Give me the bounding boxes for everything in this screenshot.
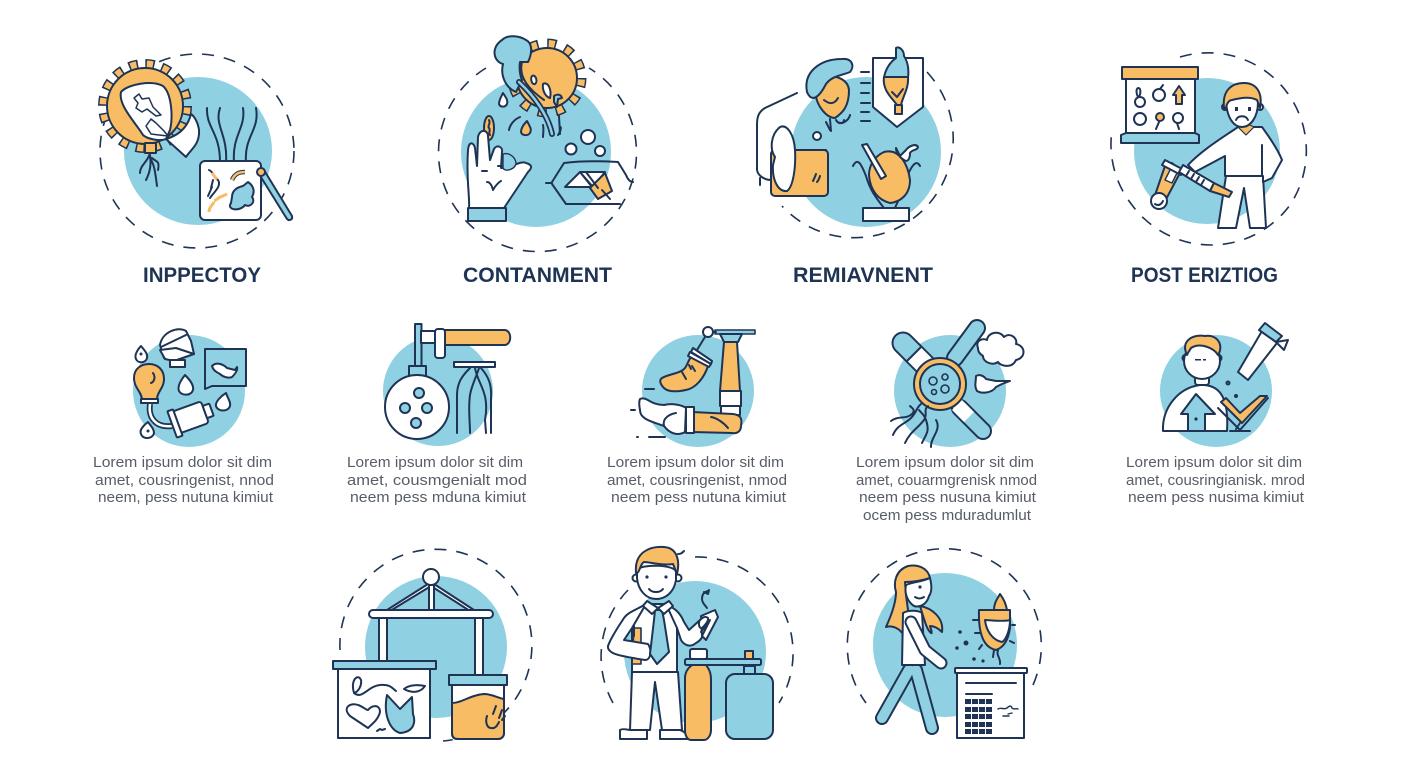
icon: squiggles <box>891 404 938 447</box>
icon: column arm <box>631 330 755 437</box>
panel: item three <box>631 327 755 447</box>
icon: frame <box>369 569 493 676</box>
heading: inspection: INPPECTOY <box>143 264 261 287</box>
blue disc <box>791 77 941 227</box>
dashed ring <box>1111 53 1306 245</box>
blue disc <box>365 576 507 718</box>
icon: sock tool <box>660 327 716 391</box>
blue disc <box>383 336 493 446</box>
text: item four <box>856 455 1037 524</box>
icon: wires <box>207 108 257 162</box>
dashed ring <box>695 557 793 703</box>
heading: removal: REMIAVNENT <box>793 264 933 287</box>
text: item three: amet, cousringenist, nmod <box>607 473 787 489</box>
icon: small bubble <box>813 132 821 140</box>
icon: folder with hand <box>771 126 828 196</box>
blue disc <box>873 573 1017 717</box>
blue disc <box>642 335 754 447</box>
dashed ring <box>100 54 294 248</box>
panel: inspection <box>100 54 294 248</box>
text: item five: amet, cousringianisk. mrod <box>1126 473 1305 489</box>
text: item two: neem pess mduna kimiut <box>350 490 526 506</box>
panel: item five <box>1160 323 1288 447</box>
icon: shield with flame <box>873 47 923 127</box>
icon: gear with bulb <box>104 65 199 186</box>
text: item four: amet, couarmgrenisk nmod <box>856 473 1037 489</box>
icon: droplets <box>499 93 507 107</box>
icon: tick marks <box>861 72 870 121</box>
icon: hand <box>467 116 531 221</box>
panel: item one <box>133 329 246 447</box>
text: item five: Lorem ipsum dolor sit dim <box>1126 455 1302 471</box>
text: item four: ocem pess mduradumlut <box>863 508 1031 524</box>
icon: capsule with shapes <box>546 161 633 204</box>
text: item five: neem pess nusima kimiut <box>1128 490 1304 506</box>
icon: orange bottle <box>685 649 711 740</box>
icon: beaker <box>449 675 507 739</box>
blue disc <box>461 77 611 227</box>
icon: small cloud <box>975 375 1010 393</box>
icon: head profile <box>757 59 852 185</box>
text: item three: Lorem ipsum dolor sit dim <box>607 455 784 471</box>
text: item four: neem pess nusuna kimiut <box>859 490 1036 506</box>
heading: post testing: POST ERIZTIOG <box>1131 264 1278 287</box>
blue disc <box>1160 335 1272 447</box>
icon: dots <box>1226 382 1238 398</box>
dashed ring <box>847 549 1041 703</box>
icon: dome <box>160 329 194 367</box>
panel: removal <box>757 47 953 238</box>
icon: bubbles <box>566 130 605 156</box>
dashed ring <box>782 72 953 238</box>
icon: schedule board <box>955 668 1027 738</box>
text: item one: Lorem ipsum dolor sit dim <box>93 455 272 471</box>
text: item three: neem pess nutuna kimiut <box>611 490 786 506</box>
icon: held tube <box>699 590 718 640</box>
icon: speech card <box>205 349 246 389</box>
text: item two <box>347 455 527 506</box>
icon: syringe <box>1151 160 1232 209</box>
icon: blue tank <box>685 651 773 739</box>
icon: woman <box>882 566 942 728</box>
text: item five <box>1126 455 1305 506</box>
text: item three <box>607 455 787 506</box>
icon: results board <box>1121 67 1199 143</box>
blue disc <box>894 335 1006 447</box>
text: item two: Lorem ipsum dolor sit dim <box>347 455 523 471</box>
icon: shield bug <box>973 594 1015 664</box>
icon: bulb with hose <box>134 364 216 438</box>
icon: particles <box>955 630 985 663</box>
panel: item four <box>891 328 1024 447</box>
panel: item two <box>383 324 510 446</box>
blue disc <box>124 77 272 225</box>
icon: sample card <box>200 161 292 220</box>
text: item one: amet, cousringenist, nnod <box>95 473 274 489</box>
blue disc <box>133 335 245 447</box>
icon: person <box>1188 83 1282 228</box>
panel: technician <box>601 547 793 740</box>
icon: hammer <box>1238 323 1288 380</box>
icon: cupped hands with heart <box>853 144 920 221</box>
icon: gear leaf <box>495 36 581 134</box>
dashed ring <box>340 549 532 741</box>
icon: magnifier lens <box>914 358 966 410</box>
icon: man <box>608 547 706 739</box>
icon: person bust <box>1163 336 1227 431</box>
text: item four: Lorem ipsum dolor sit dim <box>856 455 1034 471</box>
blue disc <box>1134 78 1280 224</box>
icon: dial <box>385 366 449 439</box>
panel: walking woman <box>847 549 1041 738</box>
icon: checkmark <box>1218 396 1268 431</box>
panel: post testing <box>1111 53 1306 245</box>
heading: containment: CONTANMENT <box>463 264 612 287</box>
icon: large cloud <box>977 333 1024 366</box>
icon: hammer <box>415 324 510 367</box>
icon: tubes <box>454 362 495 433</box>
text: item one <box>93 455 274 506</box>
text: item two: amet, cousmgenialt mod <box>347 473 527 489</box>
text: item one: neem, pess nutuna kimiut <box>98 490 273 506</box>
icon: board <box>333 661 436 738</box>
panel: setup <box>333 549 532 741</box>
panel: containment <box>438 36 637 252</box>
icon: droplets <box>135 346 230 438</box>
blue disc <box>624 581 766 723</box>
dashed ring <box>438 68 637 252</box>
icon: crossed capsules <box>903 328 983 431</box>
